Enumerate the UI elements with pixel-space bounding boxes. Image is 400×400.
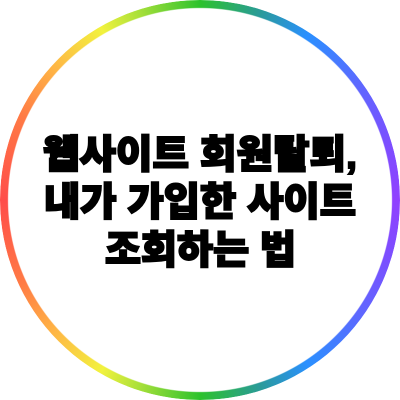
title line 3: 조회하는 법 <box>105 230 296 272</box>
title line 2: 내가 가입한 사이트 <box>44 182 356 224</box>
title line 1: 웹사이트 회원탈퇴, <box>43 134 357 177</box>
